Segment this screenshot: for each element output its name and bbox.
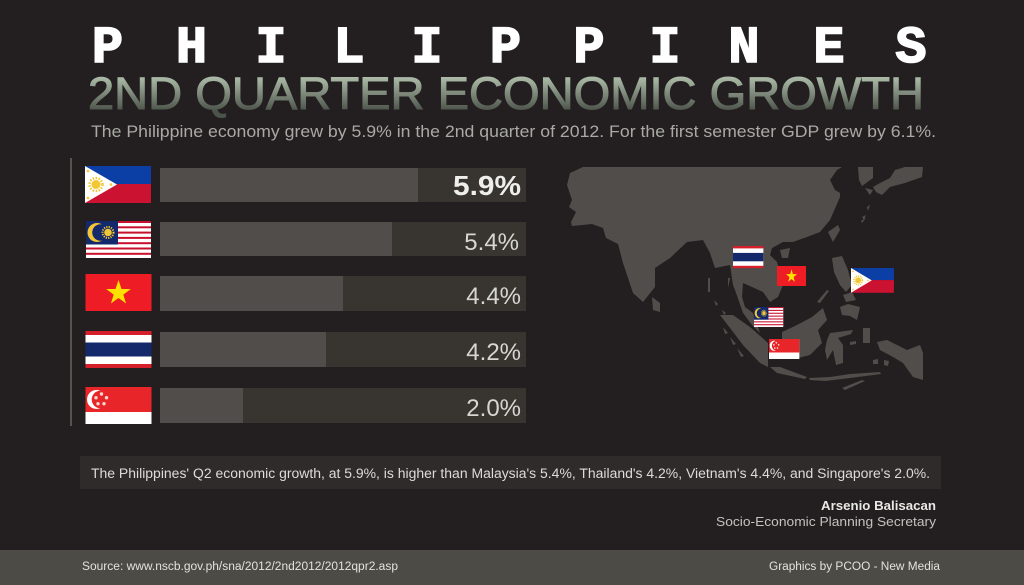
subtitle: The Philippine economy grew by 5.9% in the 2nd quarter of 2012. For the first semester GDP grew by 6.1%. xyxy=(91,123,936,141)
icon: Vietnamese flag xyxy=(86,274,152,311)
icon: Malaysia map flag xyxy=(754,307,783,327)
icon: Philippine flag xyxy=(85,166,151,203)
map land xyxy=(567,167,923,390)
callout: comparison statement xyxy=(80,456,941,489)
row: Singapore xyxy=(86,387,526,424)
row: Singapore: 2.0% xyxy=(466,395,521,422)
source: Source: www.nscb.gov.ph/sna/2012/2nd2012/2012qpr2.asp xyxy=(82,561,398,573)
icon: Thailand map flag xyxy=(733,246,763,268)
credit: Graphics by PCOO - New Media xyxy=(769,561,941,573)
row: Thailand xyxy=(86,331,526,368)
row: Vietnam: 4.4% xyxy=(466,283,521,310)
bar chart: GDP growth by country xyxy=(85,166,526,424)
footer bar xyxy=(0,550,1024,585)
attribution xyxy=(716,498,937,529)
title: Philippines: PHILIPPINES xyxy=(92,19,927,78)
heading: 2nd quarter economic growth: 2ND QUARTER ECONOMIC GROWTH xyxy=(88,68,924,119)
row: Malaysia xyxy=(86,221,526,258)
row: Philippines: 5.9% xyxy=(453,170,521,201)
attribution: Socio-Economic Planning Secretary xyxy=(716,514,937,529)
callout: comparison statement: The Philippines' Q2 economic growth, at 5.9%, is higher than Malaysia's 5.4%, Thailand's 4.2%, Vietnam's 4.4%, and Singapore's 2.0%. xyxy=(91,466,930,481)
icon: Singapore flag xyxy=(86,387,152,424)
attribution: Arsenio Balisacan xyxy=(821,498,936,513)
map: Southeast Asia xyxy=(567,167,923,390)
row: Malaysia: 5.4% xyxy=(464,229,519,256)
icon: Singapore map flag xyxy=(769,339,799,359)
row: Philippines xyxy=(85,166,526,203)
row: Vietnam xyxy=(86,274,526,311)
icon: Philippines map flag xyxy=(851,268,894,293)
icon: Vietnam map flag xyxy=(777,266,806,286)
row: Thailand: 4.2% xyxy=(466,339,521,366)
icon: Malaysian flag xyxy=(86,221,151,258)
icon: Thai flag xyxy=(86,331,152,368)
axis line xyxy=(70,158,72,426)
